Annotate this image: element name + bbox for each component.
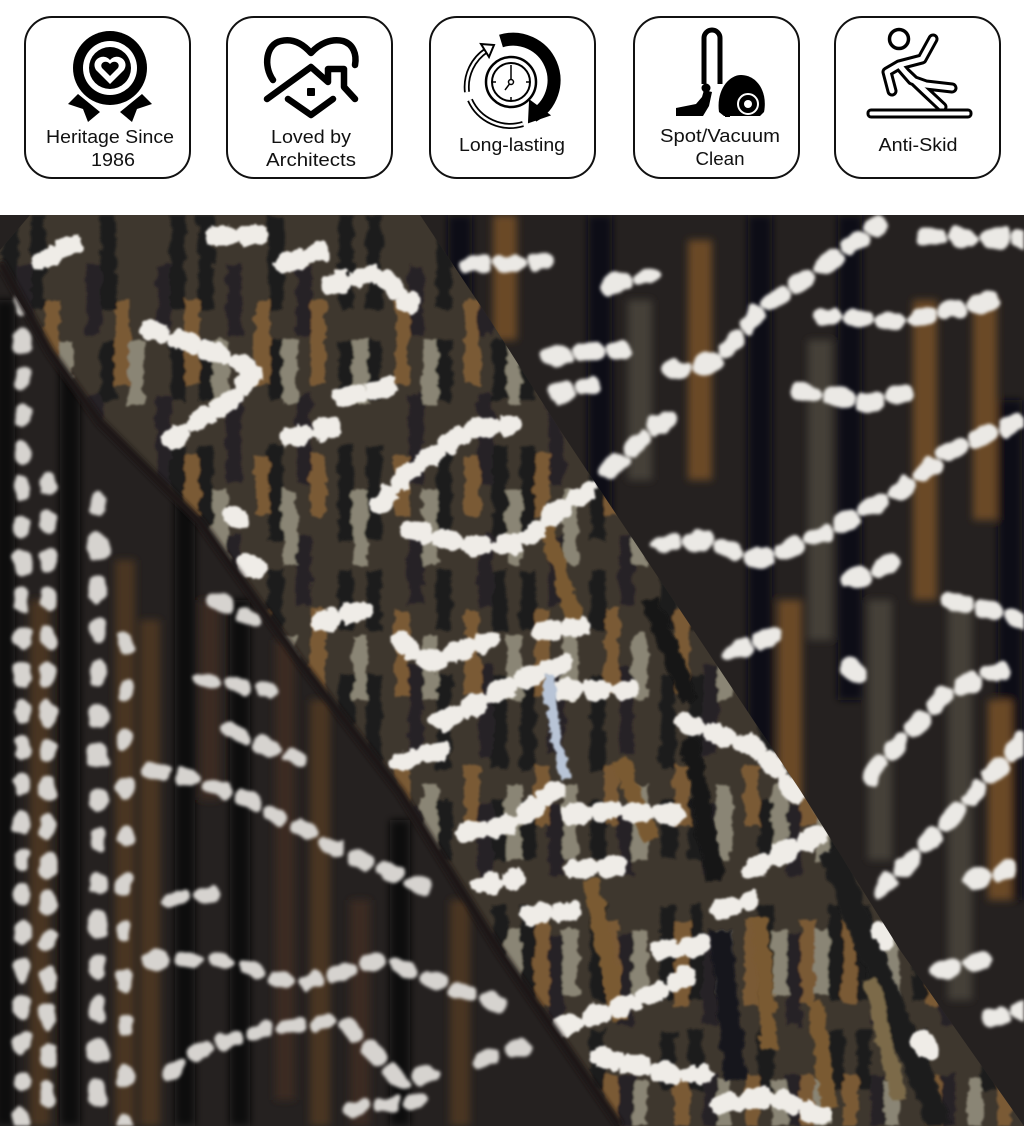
label: Heritage Since 1986 [46,127,174,170]
label: Heritage Since 1986: Heritage Since [46,127,174,147]
card: Long-lasting [430,17,595,178]
card: Loved by Architects [227,17,392,178]
card: Spot/Vacuum Clean [634,17,799,178]
band strand stripes [10,215,1004,1126]
card: Heritage Since 1986 [25,17,190,178]
icon: award ribbon with heart [68,31,152,122]
label: Anti-Skid: Anti-Skid [878,135,958,155]
label: Loved by Architects: Architects [266,150,356,170]
label: Spot/Vacuum Clean: Spot/Vacuum [660,126,780,146]
band white zigzag tufts [40,235,930,1115]
right background white chevrons [470,225,1024,1020]
left background white marks [22,300,540,1126]
label: Spot/Vacuum Clean [660,126,780,169]
right background stripes [460,215,1010,1000]
left background stripes [5,300,460,1126]
label: Spot/Vacuum Clean: Clean [696,149,744,169]
icon: person slipping on floor [868,30,971,117]
card: Anti-Skid [835,17,1000,178]
band pale blue highlight [548,675,566,780]
band lower-right brown and grey tones [545,520,940,1126]
label: Loved by Architects: Loved by [271,127,351,147]
label: Long-lasting: Long-lasting [459,135,565,155]
label: Heritage Since 1986: 1986 [91,150,135,170]
icon: clock with circular arrows [467,39,554,126]
icon: heart and house [267,40,356,115]
band edge shading [0,262,620,1126]
label: Loved by Architects [266,127,356,170]
icon: vacuum cleaner [676,30,765,117]
